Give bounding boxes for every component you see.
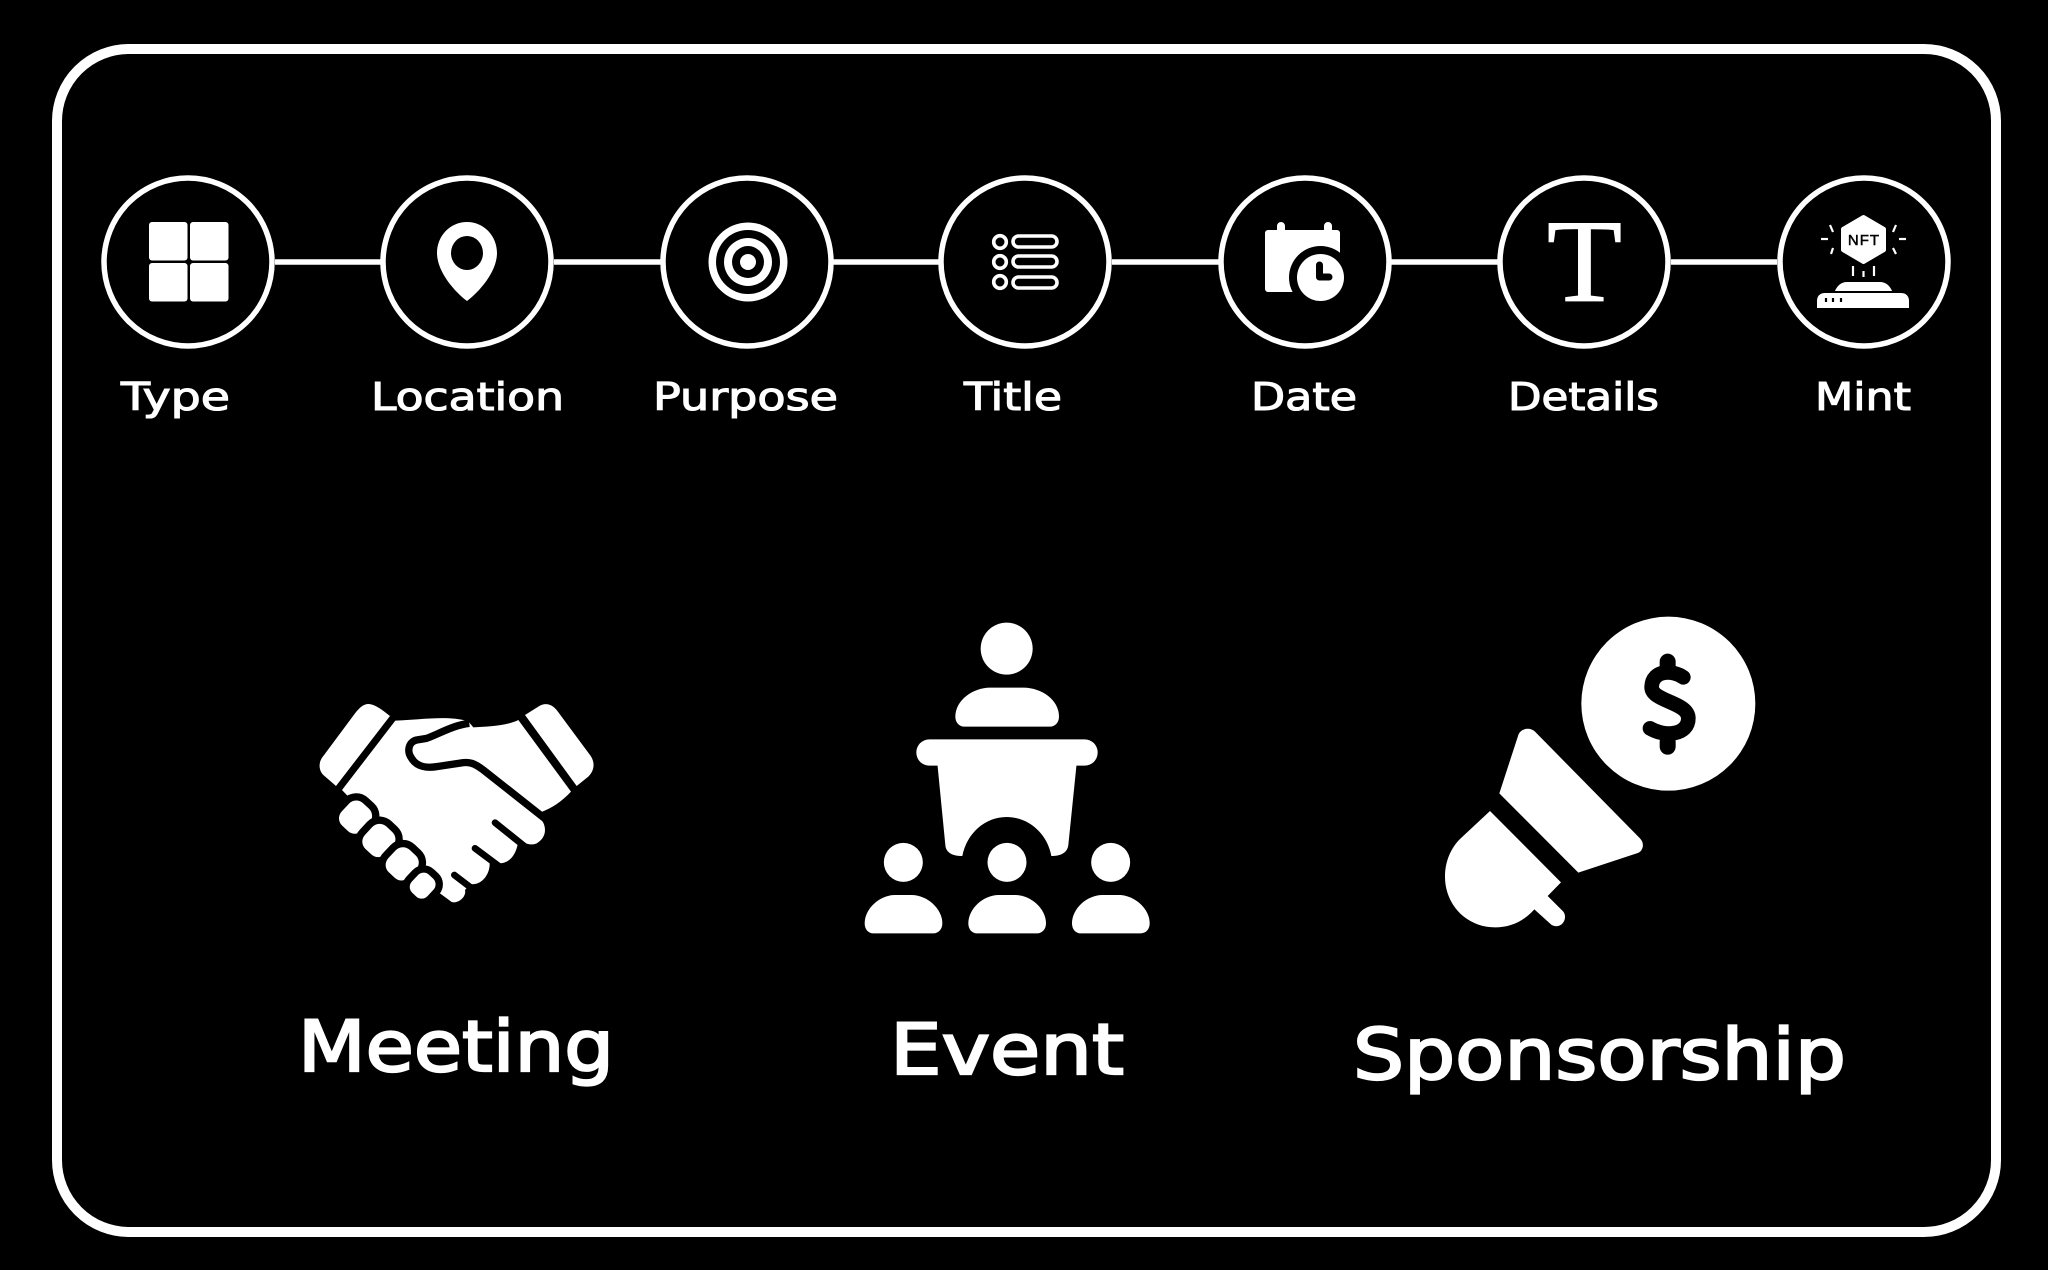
label: Location: Location [371, 375, 564, 419]
icon: target [708, 222, 788, 302]
icon: list [994, 236, 1057, 288]
step: Location [371, 178, 564, 419]
timeline connector lines [275, 259, 1777, 265]
step: Type [104, 178, 272, 419]
label: Title: Title [963, 375, 1062, 419]
card: Meeting [298, 704, 614, 1088]
label: Purpose: Purpose [653, 375, 838, 419]
icon: NFT hologram: NFT [1848, 232, 1880, 249]
label: Mint: Mint [1815, 375, 1911, 419]
label: Type: Type [120, 375, 230, 419]
icon: handshake [320, 704, 594, 902]
icon: map pin [437, 222, 497, 301]
label: Event: Event [890, 1009, 1124, 1091]
card: Sponsorship [1353, 617, 1846, 1096]
label: Details: Details [1508, 375, 1659, 419]
step: Purpose [653, 178, 838, 419]
step: Date [1221, 178, 1389, 419]
icon: megaphone with dollar coin [1445, 617, 1755, 927]
label: Meeting: Meeting [298, 1006, 614, 1088]
icon: speaker at podium with audience [865, 623, 1150, 933]
step: Title [941, 178, 1109, 419]
icon: calendar with clock [1265, 222, 1353, 309]
icon: grid [149, 222, 228, 302]
step: Mint [1780, 178, 1948, 419]
icon: letter T: T [1547, 197, 1622, 327]
card: Event [865, 623, 1150, 1091]
label: Sponsorship: Sponsorship [1353, 1014, 1846, 1096]
icon: NFT hologram [1817, 217, 1909, 308]
step: Details [1500, 178, 1668, 419]
label: Date: Date [1251, 375, 1357, 419]
